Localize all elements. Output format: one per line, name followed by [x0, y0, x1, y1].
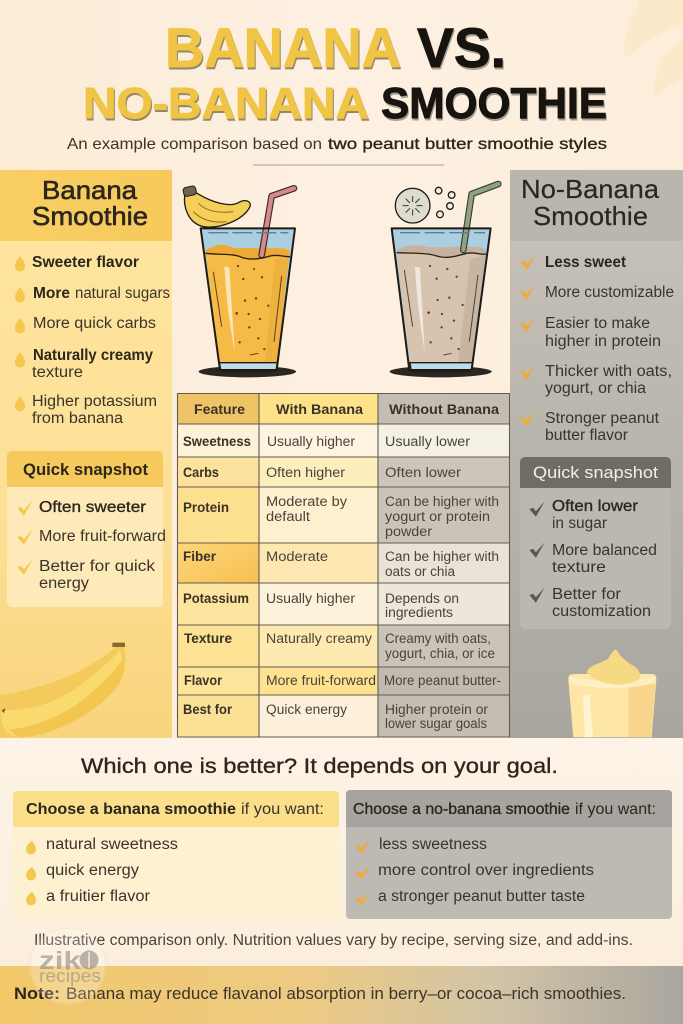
snapshot heading	[520, 457, 671, 488]
row: best for: Higher protein or	[385, 702, 489, 717]
card heading: if you want:	[241, 801, 324, 818]
subtitle: An example comparison based on	[67, 136, 322, 153]
row: protein: default	[266, 509, 310, 524]
snapshot heading: Quick snapshot	[533, 464, 658, 482]
row: carbs: Carbs	[183, 465, 219, 480]
row: potassium: Potassium	[183, 591, 249, 606]
snapshot heading	[7, 451, 163, 487]
item: less sweetness: less sweetness	[379, 836, 487, 853]
bottom section background	[0, 738, 683, 966]
row: fiber	[183, 549, 499, 579]
table header row: Without Banana	[389, 402, 500, 417]
subtitle	[67, 136, 607, 153]
section heading: which one is better: Which one is better? It depends on your goal.	[81, 754, 558, 778]
item: higher potassium: Higher potassium	[32, 393, 157, 410]
note strip	[0, 966, 683, 1024]
row: protein: Moderate by	[266, 494, 347, 509]
panel: no-banana smoothie	[510, 170, 683, 738]
title: NO-BANANA	[83, 79, 369, 128]
item: natural sweetness: natural sweetness	[46, 836, 178, 853]
item: thicker with oats: Thicker with oats,	[545, 363, 672, 380]
item: stronger peanut butter flavor: butter flavor	[545, 427, 628, 444]
panel heading: No-Banana Smoothie: No-Banana	[521, 174, 660, 204]
item: quick energy: quick energy	[46, 862, 139, 879]
check item: better for quick energy	[17, 558, 155, 592]
watermark: ziko recipes: zik	[39, 947, 81, 975]
row: potassium: Usually higher	[266, 591, 356, 606]
card heading	[13, 791, 339, 827]
check item: often lower in sugar: in sugar	[552, 515, 607, 532]
row: texture: Naturally creamy	[266, 631, 372, 646]
table header row: Feature	[194, 402, 245, 417]
check item: better for quick energy: energy	[39, 575, 89, 592]
row: texture: Texture	[184, 631, 232, 646]
item: higher potassium: from banana	[32, 410, 123, 427]
row: protein: powder	[385, 524, 433, 539]
panel heading: Banana Smoothie: Banana	[42, 175, 138, 205]
row: best for: Best for	[183, 702, 233, 717]
row: fiber: oats or chia	[385, 564, 455, 579]
row: protein: yogurt or protein	[385, 509, 490, 524]
panel: banana smoothie	[0, 170, 172, 738]
list: banana traits	[15, 254, 170, 427]
row: fiber: Moderate	[266, 549, 328, 564]
item: naturally creamy texture	[15, 347, 153, 381]
decorative faint leaves top right	[624, 0, 683, 98]
quick snapshot: banana	[7, 451, 166, 607]
title: SMOOTHIE	[381, 79, 607, 128]
check item: better for customization: Better for	[552, 586, 621, 603]
item: a stronger peanut butter taste: a stronger peanut butter taste	[378, 888, 585, 905]
panel heading: Banana Smoothie	[0, 170, 172, 241]
card heading	[346, 790, 672, 827]
note strip: Note:	[14, 985, 60, 1003]
check item: better for customization	[529, 586, 651, 620]
row: fiber: Fiber	[183, 549, 217, 564]
table fills: column two	[259, 393, 378, 737]
subtitle: two peanut butter smoothie styles	[328, 136, 607, 153]
row: best for: lower sugar goals	[385, 716, 487, 731]
row: potassium	[183, 591, 459, 620]
item: more customizable: More customizable	[545, 284, 674, 301]
card heading: Choose a banana smoothie	[26, 801, 236, 818]
item: easier to make higher in protein	[520, 315, 661, 350]
watermark: ziko recipes: recipes	[39, 966, 101, 986]
item: naturally creamy texture: texture	[32, 364, 83, 381]
illustration: smoothie cup	[568, 650, 656, 737]
check item: more balanced texture: texture	[552, 559, 606, 576]
row: texture	[184, 631, 495, 661]
table fills: column one	[177, 393, 259, 737]
row: potassium: ingredients	[385, 605, 453, 620]
row: best for: Quick energy	[266, 702, 347, 717]
row: sweetness	[183, 434, 471, 449]
card: choose a no-banana smoothie	[346, 790, 672, 919]
snapshot heading: Quick snapshot	[23, 461, 149, 479]
title	[83, 16, 607, 128]
row: carbs: Often higher	[266, 465, 346, 480]
quick snapshot: no banana	[520, 457, 671, 629]
item: more natural sugars: natural sugars	[75, 285, 170, 302]
check item: often lower in sugar: Often lower	[552, 498, 638, 515]
row: sweetness: Usually lower	[385, 434, 471, 449]
item: thicker with oats: yogurt, or chia	[545, 380, 646, 397]
title: VS.	[417, 16, 506, 79]
table header row	[194, 402, 500, 417]
panel heading: No-Banana Smoothie: Smoothie	[533, 201, 648, 231]
row: flavor: More peanut butter-	[384, 673, 501, 688]
item: more quick carbs: More quick carbs	[33, 315, 156, 332]
row: sweetness: Usually higher	[267, 434, 356, 449]
item: higher potassium	[15, 393, 157, 427]
item: less sweet: Less sweet	[545, 254, 626, 271]
row: carbs: Often lower	[385, 465, 462, 480]
table header row: With Banana	[276, 402, 364, 417]
check item: often lower in sugar	[529, 498, 638, 532]
item: more control over ingredients: more control over ingredients	[378, 862, 594, 879]
illustration: no-banana smoothie glass	[390, 184, 498, 377]
item: a fruitier flavor: a fruitier flavor	[46, 888, 150, 905]
item: stronger peanut butter flavor	[520, 410, 660, 444]
row: flavor	[184, 673, 501, 688]
row: potassium: Depends on	[385, 591, 459, 606]
row: sweetness: Sweetness	[183, 434, 251, 449]
panel heading: No-Banana Smoothie	[510, 170, 683, 241]
row: best for	[183, 702, 489, 731]
illustration: banana smoothie glass	[183, 185, 296, 377]
item: thicker with oats	[520, 363, 672, 397]
item: naturally creamy texture: Naturally creamy	[33, 347, 153, 364]
card heading: Choose a no-banana smoothie	[353, 801, 570, 818]
item: stronger peanut butter flavor: Stronger peanut	[545, 410, 660, 427]
check item: more balanced texture: More balanced	[552, 542, 657, 559]
check item: often sweeter: Often sweeter	[39, 499, 146, 516]
item: easier to make higher in protein: Easier to make	[545, 315, 650, 332]
list: no-banana traits	[520, 254, 674, 444]
card: choose a banana smoothie	[13, 791, 339, 920]
item: more natural sugars	[15, 285, 170, 302]
note strip: Banana may reduce flavanol absorption in berry–or cocoa–rich smoothies.	[66, 985, 626, 1003]
row: protein: Can be higher with	[385, 494, 499, 509]
comparison table	[177, 393, 510, 737]
row: texture: Creamy with oats,	[385, 631, 491, 646]
row: texture: yogurt, chia, or ice	[385, 646, 495, 661]
check item: more balanced texture	[529, 542, 657, 576]
check item: better for customization: customization	[552, 603, 651, 620]
illustration: banana	[0, 643, 126, 737]
row: protein	[183, 494, 499, 539]
table fills: column three	[378, 393, 510, 737]
row: fiber: Can be higher with	[385, 549, 499, 564]
card heading: if you want:	[575, 801, 656, 818]
check item: more fruit-forward: More fruit-forward	[39, 528, 166, 545]
item: more natural sugars: More	[33, 285, 70, 302]
watermark: ziko recipes	[30, 928, 106, 1004]
title: BANANA	[165, 16, 401, 79]
disclaimer: Illustrative comparison only. Nutrition values vary by recipe, serving size, and add-ins.	[34, 932, 633, 949]
item: easier to make higher in protein: higher in protein	[545, 333, 661, 350]
row: protein: Protein	[183, 500, 229, 515]
panel heading: Banana Smoothie: Smoothie	[32, 201, 148, 231]
row: flavor: More fruit-forward	[266, 673, 376, 688]
item: sweeter flavor: Sweeter flavor	[32, 254, 139, 271]
check item: better for quick energy: Better for quick	[39, 558, 155, 575]
row: flavor: Flavor	[184, 673, 223, 688]
row: carbs	[183, 465, 462, 480]
